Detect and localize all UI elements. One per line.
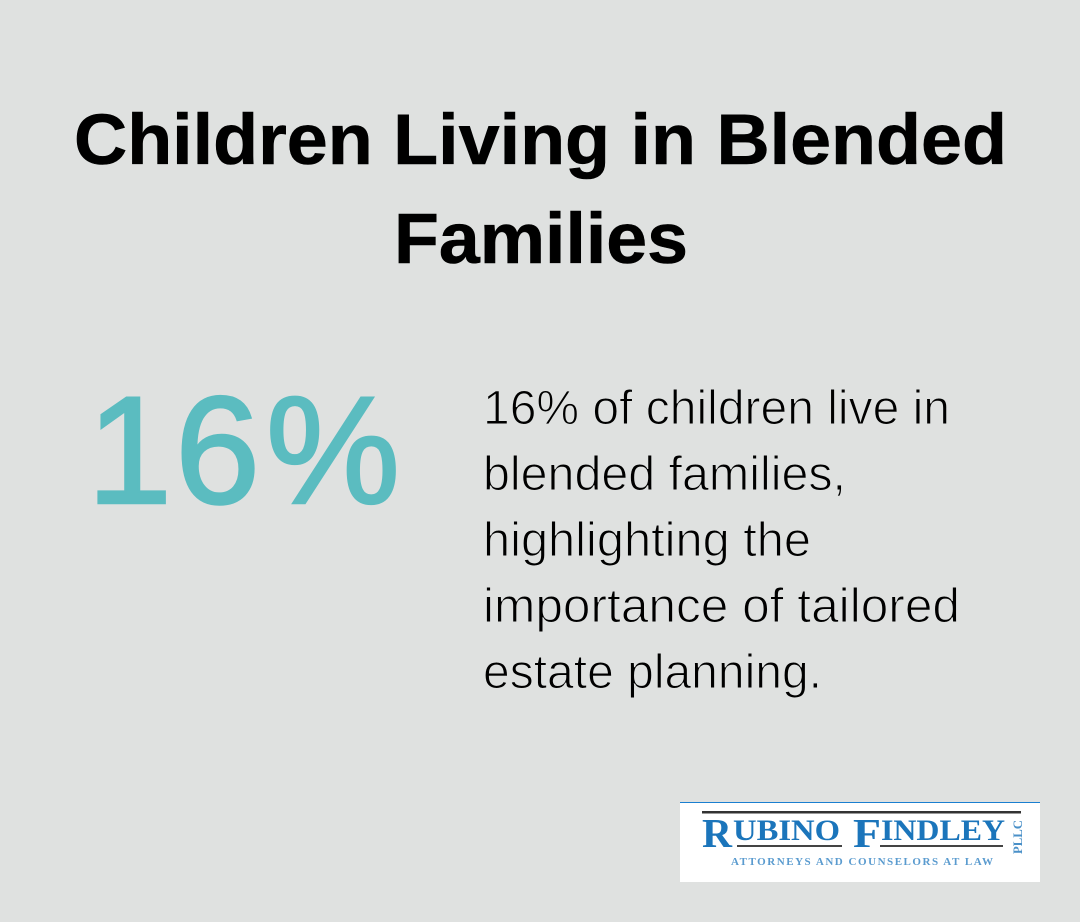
logo: Rubino Findley: F	[853, 810, 881, 856]
title	[74, 101, 1007, 279]
logo: Rubino Findley: UBINO	[733, 814, 840, 847]
description text: blended families,	[483, 448, 846, 501]
big statistic: 16%	[87, 365, 400, 536]
logo: Rubino Findley: ATTORNEYS AND COUNSELORS AT LAW	[731, 856, 993, 868]
title: Families	[394, 200, 688, 279]
description text: highlighting the	[483, 514, 811, 567]
description text: 16% of children live in	[483, 382, 950, 435]
big statistic: 16%: %	[266, 365, 400, 536]
logo: Rubino Findley	[680, 802, 1040, 882]
title: Children Living in Blended	[74, 101, 1007, 180]
logo: Rubino Findley: INDLEY	[881, 814, 1005, 847]
description text: importance of tailored	[483, 580, 960, 633]
description text	[483, 382, 960, 699]
description text: estate planning.	[483, 646, 822, 699]
logo: Rubino Findley: PLLC	[1010, 820, 1025, 854]
big statistic: 16%: 6	[175, 365, 260, 536]
big statistic: 16%: 1	[87, 365, 172, 536]
logo: Rubino Findley: R	[702, 810, 732, 856]
